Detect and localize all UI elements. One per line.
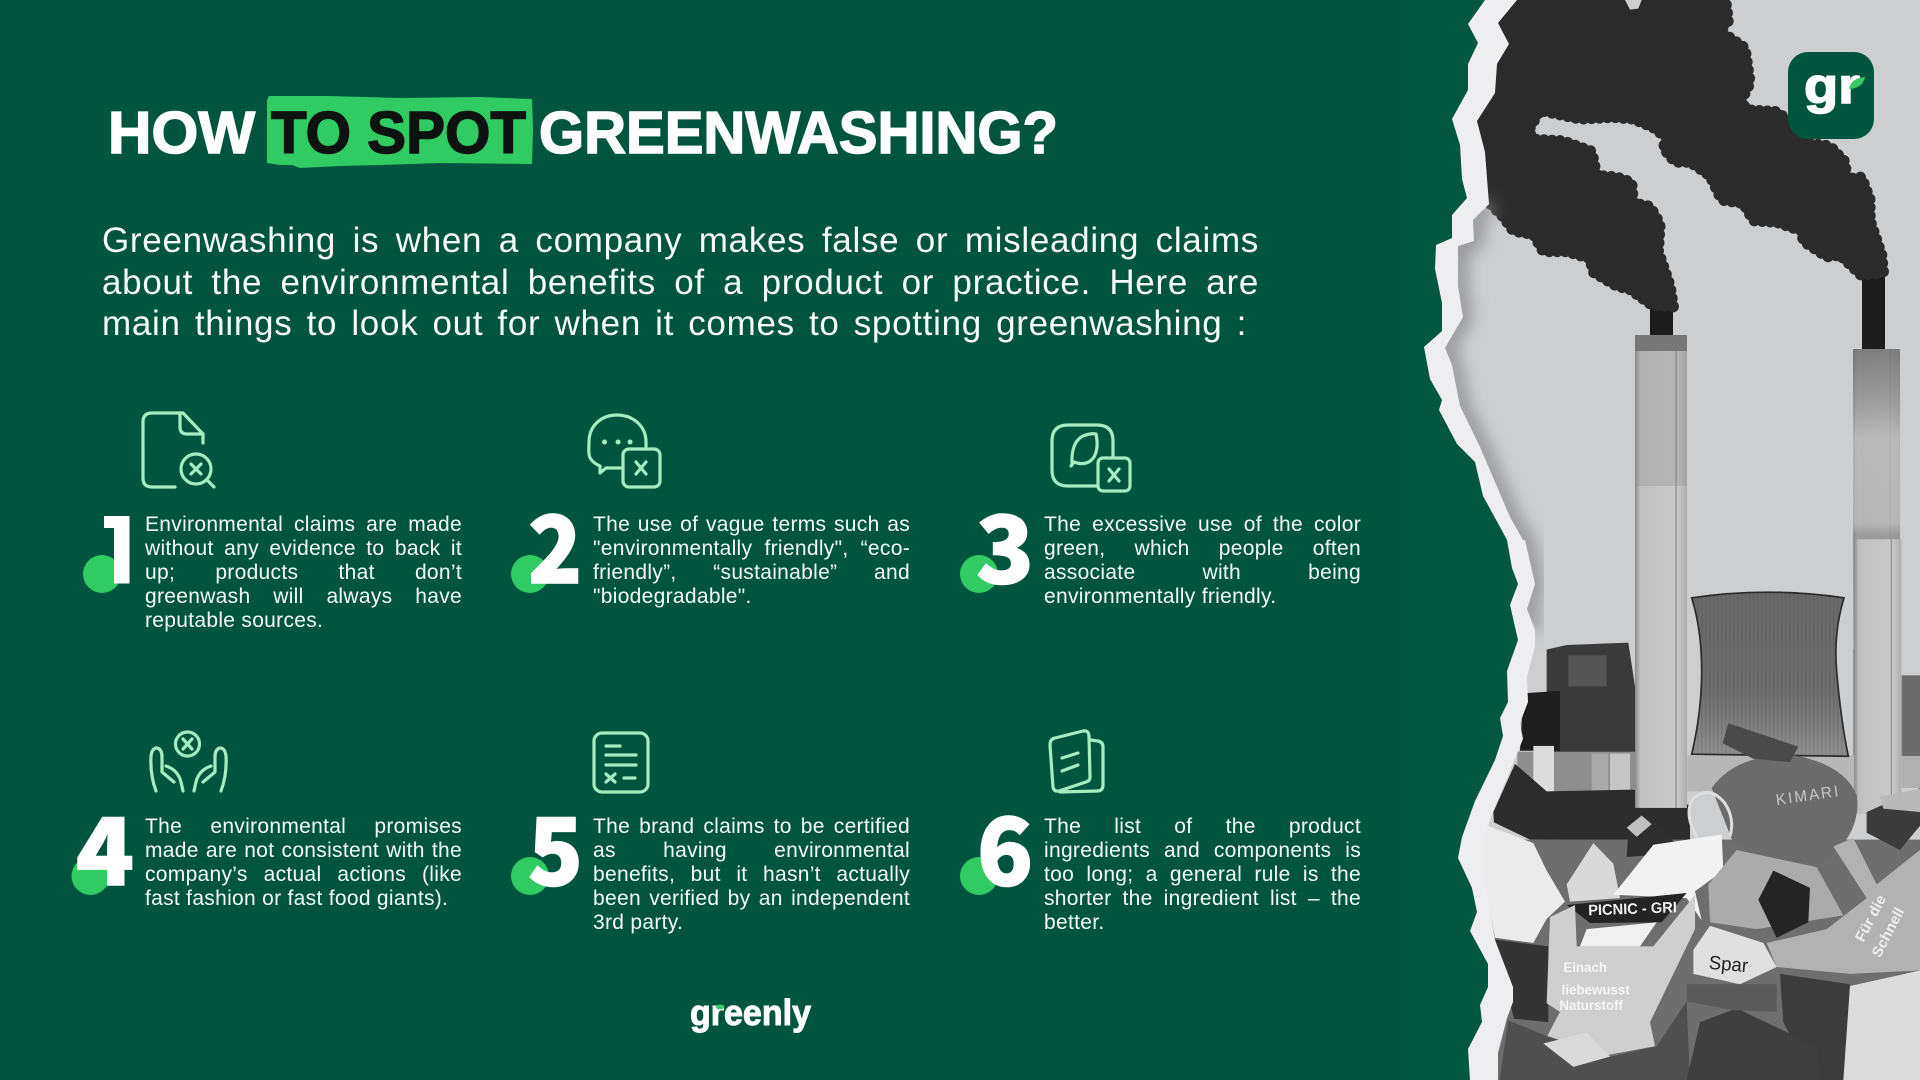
logo badge: gr: gr <box>1804 58 1860 114</box>
tip 6 text: too long; a general rule is the <box>1044 863 1361 886</box>
shadow under the torn paper <box>1445 204 1535 630</box>
tip 4 text: company’s actual actions (like <box>145 863 462 886</box>
intro paragraph: Greenwashing is when a company makes false or misleading claims <box>102 221 1259 260</box>
large paper bag: Einach <box>1563 960 1607 975</box>
title <box>108 96 1058 168</box>
smoke plumes <box>1467 0 1883 307</box>
torn white paper edge <box>1400 0 1535 1080</box>
black strip label <box>1567 893 1687 923</box>
tip 4 text <box>145 815 462 910</box>
tip 6 text: ingredients and components is <box>1044 839 1361 862</box>
grey printed bag: Schnell <box>1870 905 1908 960</box>
tip 4 text: fast fashion or fast food giants). <box>145 887 448 910</box>
tip 3 text: associate with being <box>1044 561 1361 584</box>
tip 2 text: The use of vague terms such as <box>593 513 910 536</box>
large paper bag <box>1543 895 1695 1055</box>
intro paragraph <box>102 221 1259 343</box>
tip 5 text: 3rd party. <box>593 911 683 934</box>
tip 2 text: "biodegradable". <box>593 585 752 608</box>
intro paragraph: main things to look out for when it comes to spotting greenwashing : <box>102 304 1247 343</box>
icon: leaf in rounded square with cross <box>1052 425 1130 491</box>
panel: tip 3 <box>960 423 1361 610</box>
panel: tip 5 <box>511 731 910 934</box>
tip 1 text: up; products that don’t <box>145 561 462 584</box>
tip 1 text: reputable sources. <box>145 609 323 632</box>
tip 3 text <box>1044 513 1361 608</box>
icon: stacked documents <box>1050 731 1103 792</box>
title words TO SPOT: TO SPOT <box>271 100 526 166</box>
crumpled bag: KIMARI <box>1712 755 1857 871</box>
number 6: 6 <box>977 777 1033 912</box>
tip 6 text: better. <box>1044 911 1104 934</box>
tip 5 text: as having environmental <box>593 839 910 862</box>
tip 5 text: been verified by an independent <box>593 887 910 910</box>
icon: document with search cross <box>143 413 214 487</box>
small label bag: Spar <box>1693 926 1777 984</box>
waste pile <box>1482 723 1920 1080</box>
logo badge: gr <box>1788 52 1874 139</box>
tip 6 text: The list of the product <box>1044 815 1361 838</box>
number 3: 3 <box>976 475 1034 610</box>
icon: speech bubble with cross <box>589 415 660 487</box>
green highlight behind TO SPOT <box>267 96 533 168</box>
tip 5 text <box>593 815 910 934</box>
panel: tip 6 <box>960 729 1361 934</box>
icon: hands holding crossed circle <box>151 732 226 791</box>
tip 2 text: "environmentally friendly", “eco- <box>593 537 910 560</box>
bag handle <box>1689 792 1732 845</box>
battery <box>1758 871 1810 938</box>
black strip label: PICNIC - GRI <box>1588 900 1677 919</box>
title word HOW: HOW <box>108 100 255 166</box>
large paper bag: liebewusst <box>1562 982 1630 998</box>
panel: tip 4 <box>72 730 462 912</box>
intro paragraph: about the environmental benefits of a product or practice. Here are <box>102 263 1259 302</box>
number 2: 2 <box>528 475 582 610</box>
number 1 <box>83 516 130 593</box>
tip 1 text <box>145 513 462 632</box>
tip 1 text: without any evidence to back it <box>145 537 462 560</box>
dark lower left <box>1495 939 1548 1022</box>
number 1: 1 <box>92 476 146 611</box>
tip 2 text: friendly”, “sustainable” and <box>593 561 910 584</box>
chimney left <box>1635 307 1687 810</box>
logo: greenly wordmark: greenly <box>690 992 811 1033</box>
grey printed bag: Für die <box>1853 893 1890 945</box>
tip 1 text: Environmental claims are made <box>145 513 462 536</box>
number 4: 4 <box>76 777 134 912</box>
panel: tip 2 <box>511 413 910 610</box>
photo background sky <box>1400 0 1920 1080</box>
crumpled bag: KIMARI: KIMARI <box>1775 783 1841 809</box>
grey printed bag <box>1767 838 1920 974</box>
title word GREENWASHING?: GREENWASHING? <box>539 100 1058 166</box>
number 5: 5 <box>528 777 583 912</box>
tip 4 text: The environmental promises <box>145 815 462 838</box>
green torn edge of left panel <box>1400 0 1518 1080</box>
tip 4 text: made are not consistent with the <box>145 839 462 862</box>
tip 6 text: shorter the ingredient list – the <box>1044 887 1361 910</box>
icon: checklist with cross <box>594 733 648 792</box>
tip 5 text: The brand claims to be certified <box>593 815 910 838</box>
large paper bag: Naturstoff <box>1559 998 1623 1013</box>
tip 6 text <box>1044 815 1361 934</box>
tip 3 text: environmentally friendly. <box>1044 585 1276 608</box>
panel: factory and waste photo with torn paper edge <box>1424 0 1920 1080</box>
tip 1 text: greenwash will always have <box>145 585 462 608</box>
tip 3 text: green, which people often <box>1044 537 1361 560</box>
small label bag: Spar: Spar <box>1708 953 1749 977</box>
tip 5 text: benefits, but it hasn’t actually <box>593 863 910 886</box>
panel: tip 1 <box>83 411 462 632</box>
crushed can <box>1723 723 1798 762</box>
tip 2 text <box>593 513 910 608</box>
chimney right <box>1853 277 1900 814</box>
tip 3 text: The excessive use of the color <box>1044 513 1361 536</box>
white paper sheets <box>1482 824 1565 943</box>
cooling tower, power plant and trees <box>1493 539 1920 841</box>
